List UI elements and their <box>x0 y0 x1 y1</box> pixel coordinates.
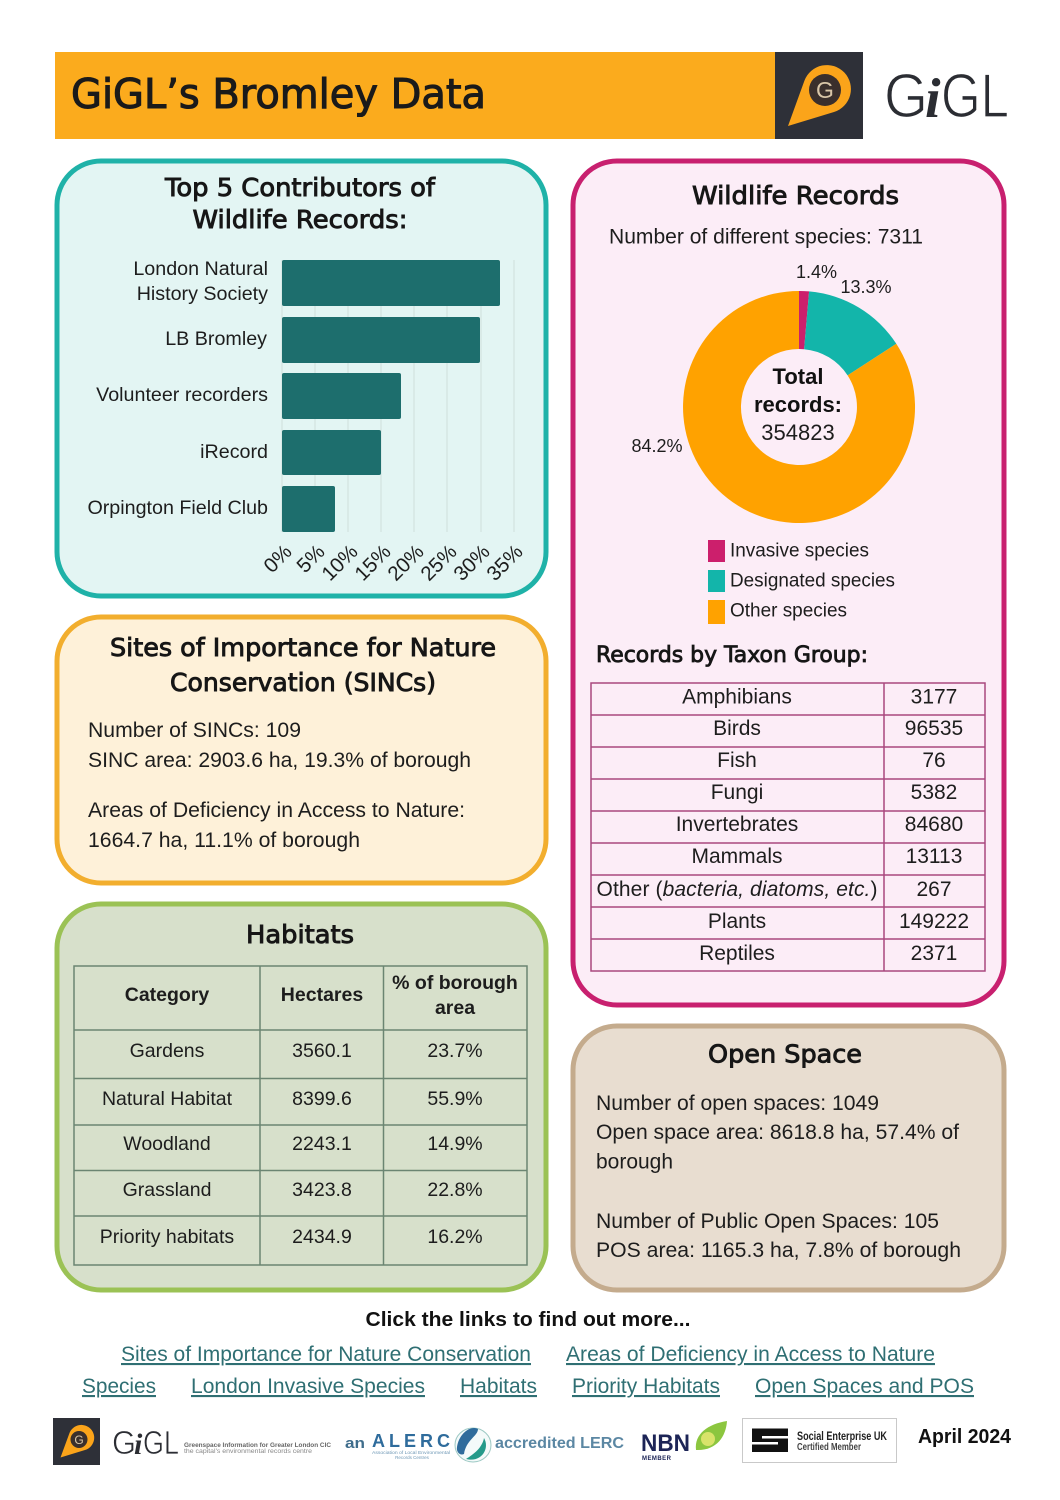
links list: Habitats <box>460 1375 537 1398</box>
bar chart: contributors: 25% <box>416 540 462 586</box>
panel: top 5 contributors <box>57 161 546 596</box>
donut chart: records by species type: 354823 <box>761 420 835 445</box>
open space statistics: Number of open spaces: 1049 <box>596 1092 879 1115</box>
table: records by taxon group: Other (bacteria, diatoms, etc.) <box>596 878 878 901</box>
heading: wildlife records: Wildlife Records <box>692 181 899 210</box>
table: records by taxon group: 84680 <box>905 813 963 836</box>
SINC statistics: Areas of Deficiency in Access to Nature: <box>88 799 465 822</box>
ALERC accreditation logo: Association of Local Environmental <box>372 1450 450 1455</box>
table: habitats: 22.8% <box>427 1179 483 1201</box>
Social Enterprise UK badge: Social Enterprise UK <box>797 1431 888 1443</box>
bar chart: contributors: 0% <box>259 540 297 577</box>
heading: top contributors <box>164 173 436 234</box>
table: habitats: 2434.9 <box>292 1226 352 1248</box>
Social Enterprise UK badge <box>742 1418 896 1462</box>
table: habitats: area <box>435 997 475 1019</box>
bar chart: contributors: 5% <box>292 540 330 577</box>
heading: SINCs <box>110 633 496 697</box>
links list <box>82 1343 974 1398</box>
title: GiGL’s Bromley Data <box>71 70 486 118</box>
GiGL footer wordmark: GL <box>143 1424 179 1461</box>
table: records by taxon group: 76 <box>922 749 946 772</box>
table: records by taxon group: 149222 <box>899 910 969 933</box>
SINC statistics: Number of SINCs: 109 <box>88 719 301 742</box>
table: records by taxon group: Plants <box>708 910 766 933</box>
GiGL wordmark: GL <box>941 62 1009 131</box>
bar chart: contributors: LB Bromley <box>165 328 267 350</box>
panel: habitats <box>57 904 546 1290</box>
table: habitats: 8399.6 <box>292 1088 352 1110</box>
links list: London Invasive Species <box>191 1375 425 1398</box>
links list: Priority Habitats <box>572 1375 720 1398</box>
donut chart: records by species type: Total <box>773 364 823 389</box>
NBN member logo: NBN <box>641 1430 690 1457</box>
table: records by taxon group: 5382 <box>911 781 957 804</box>
bar chart: contributors: 20% <box>383 540 429 586</box>
table: habitats: Priority habitats <box>100 1226 234 1248</box>
table: habitats: Grassland <box>123 1179 211 1201</box>
ALERC accreditation logo: an <box>345 1435 365 1452</box>
table: habitats: 23.7% <box>427 1040 483 1062</box>
links list: Sites of Importance for Nature Conservation <box>121 1343 531 1366</box>
bar chart: contributors: 15% <box>350 540 396 586</box>
table: habitats: Natural Habitat <box>102 1088 233 1110</box>
table: habitats: Woodland <box>123 1133 211 1155</box>
table: habitats: % of borough <box>392 972 518 994</box>
bar chart: contributors: History Society <box>137 283 268 305</box>
table: habitats: 55.9% <box>427 1088 483 1110</box>
ALERC accreditation logo <box>345 1428 624 1462</box>
heading: top contributors: Top 5 Contributors of <box>164 173 436 202</box>
bar chart: contributors: iRecord <box>200 441 268 463</box>
open space statistics <box>596 1092 961 1262</box>
table: records by taxon group: 3177 <box>911 686 957 708</box>
ALERC accreditation logo: ALERC <box>372 1431 450 1451</box>
table: habitats: 14.9% <box>427 1133 483 1155</box>
open space statistics: Open space area: 8618.8 ha, 57.4% of <box>596 1121 959 1144</box>
heading: records by taxon group: Records by Taxon Group: <box>596 643 868 668</box>
table: records by taxon group <box>591 683 985 971</box>
Social Enterprise UK badge: Certified Member <box>797 1442 861 1453</box>
GiGL footer wordmark: Greenspace Information for Greater London CIC <box>184 1442 331 1449</box>
heading: SINCs: Conservation (SINCs) <box>170 668 436 697</box>
bar chart: contributors <box>87 258 528 586</box>
bar chart: contributors: London Natural <box>133 258 268 280</box>
icon: small GiGL pin logo <box>53 1418 100 1465</box>
SINC statistics: 1664.7 ha, 11.1% of borough <box>88 829 360 852</box>
GiGL wordmark <box>884 62 1009 131</box>
donut chart: records by species type: 13.3% <box>840 277 892 297</box>
GiGL wordmark: i <box>925 68 941 130</box>
GiGL footer wordmark: the capital's environmental records centre <box>184 1449 313 1455</box>
links list: Open Spaces and POS <box>755 1375 974 1398</box>
icon: GiGL map pin logo <box>775 52 863 139</box>
table: records by taxon group: Fish <box>717 749 757 772</box>
table: records by taxon group: Amphibians <box>682 686 792 708</box>
ALERC accreditation logo: Records Centres <box>395 1455 430 1460</box>
GiGL wordmark: G <box>884 62 928 131</box>
table: habitats: Category <box>125 984 209 1006</box>
panel: wildlife records <box>573 161 1004 1005</box>
open space statistics: borough <box>596 1150 673 1174</box>
ALERC accreditation logo: accredited LERC <box>495 1435 624 1452</box>
GiGL footer wordmark: i <box>134 1428 143 1461</box>
table: records by taxon group: 13113 <box>906 845 962 868</box>
legend: Invasive species <box>730 540 869 562</box>
bar chart: contributors: Volunteer recorders <box>96 384 268 406</box>
icon: small GiGL pin logo: G <box>74 1433 84 1447</box>
table: habitats: Hectares <box>281 984 363 1006</box>
panel: open space <box>573 1026 1004 1290</box>
bar chart: contributors: Orpington Field Club <box>87 497 268 519</box>
donut chart: records by species type: 1.4% <box>796 262 837 282</box>
heading: SINCs: Sites of Importance for Nature <box>110 633 496 662</box>
table: records by taxon group: Reptiles <box>699 942 775 965</box>
links section <box>82 1309 974 1398</box>
panel: SINCs <box>57 617 546 883</box>
table: records by taxon group: Birds <box>713 717 761 740</box>
donut chart: records by species type: 84.2% <box>631 436 683 456</box>
table: records by taxon group: 267 <box>916 878 952 901</box>
bar chart: contributors: 10% <box>317 540 363 586</box>
date: April 2024 <box>918 1426 1012 1448</box>
open space statistics: Number of Public Open Spaces: 105 <box>596 1210 939 1233</box>
table: records by taxon group: Invertebrates <box>676 813 798 836</box>
table: habitats <box>74 966 527 1265</box>
table: habitats: Gardens <box>130 1040 205 1062</box>
bar chart: contributors: 35% <box>482 540 528 586</box>
bar chart: contributors: 30% <box>449 540 495 586</box>
legend: Other species <box>730 600 847 622</box>
species count: Number of different species: 7311 <box>609 226 923 248</box>
icon: GiGL map pin logo: G <box>816 77 834 103</box>
SINC statistics <box>88 719 471 852</box>
GiGL footer wordmark: G <box>112 1424 136 1461</box>
table: records by taxon group: 96535 <box>905 717 963 740</box>
header banner <box>55 52 1009 139</box>
links list: Areas of Deficiency in Access to Nature <box>566 1343 935 1366</box>
donut chart: records by species type: records: <box>754 392 842 417</box>
links list: Species <box>82 1375 156 1398</box>
table: records by taxon group: Mammals <box>691 845 783 868</box>
table: habitats: 2243.1 <box>292 1133 352 1155</box>
table: habitats: 3560.1 <box>292 1040 352 1062</box>
table: habitats: 16.2% <box>427 1226 483 1248</box>
table: records by taxon group: Fungi <box>711 781 763 804</box>
heading: open space: Open Space <box>708 1040 862 1068</box>
heading: top contributors: Wildlife Records: <box>192 205 408 234</box>
open space statistics: POS area: 1165.3 ha, 7.8% of borough <box>596 1239 961 1262</box>
NBN member logo <box>641 1421 727 1462</box>
donut chart: records by species type <box>631 262 915 523</box>
links heading: Click the links to find out more... <box>366 1309 690 1331</box>
table: habitats: 3423.8 <box>292 1179 352 1201</box>
GiGL footer wordmark <box>112 1424 331 1461</box>
SINC statistics: SINC area: 2903.6 ha, 19.3% of borough <box>88 749 471 772</box>
table: records by taxon group: 2371 <box>911 942 957 965</box>
heading: habitats: Habitats <box>246 920 354 949</box>
footer logos <box>53 1418 1012 1465</box>
NBN member logo: MEMBER <box>642 1456 672 1462</box>
legend: Designated species <box>730 570 895 592</box>
legend <box>708 540 895 624</box>
